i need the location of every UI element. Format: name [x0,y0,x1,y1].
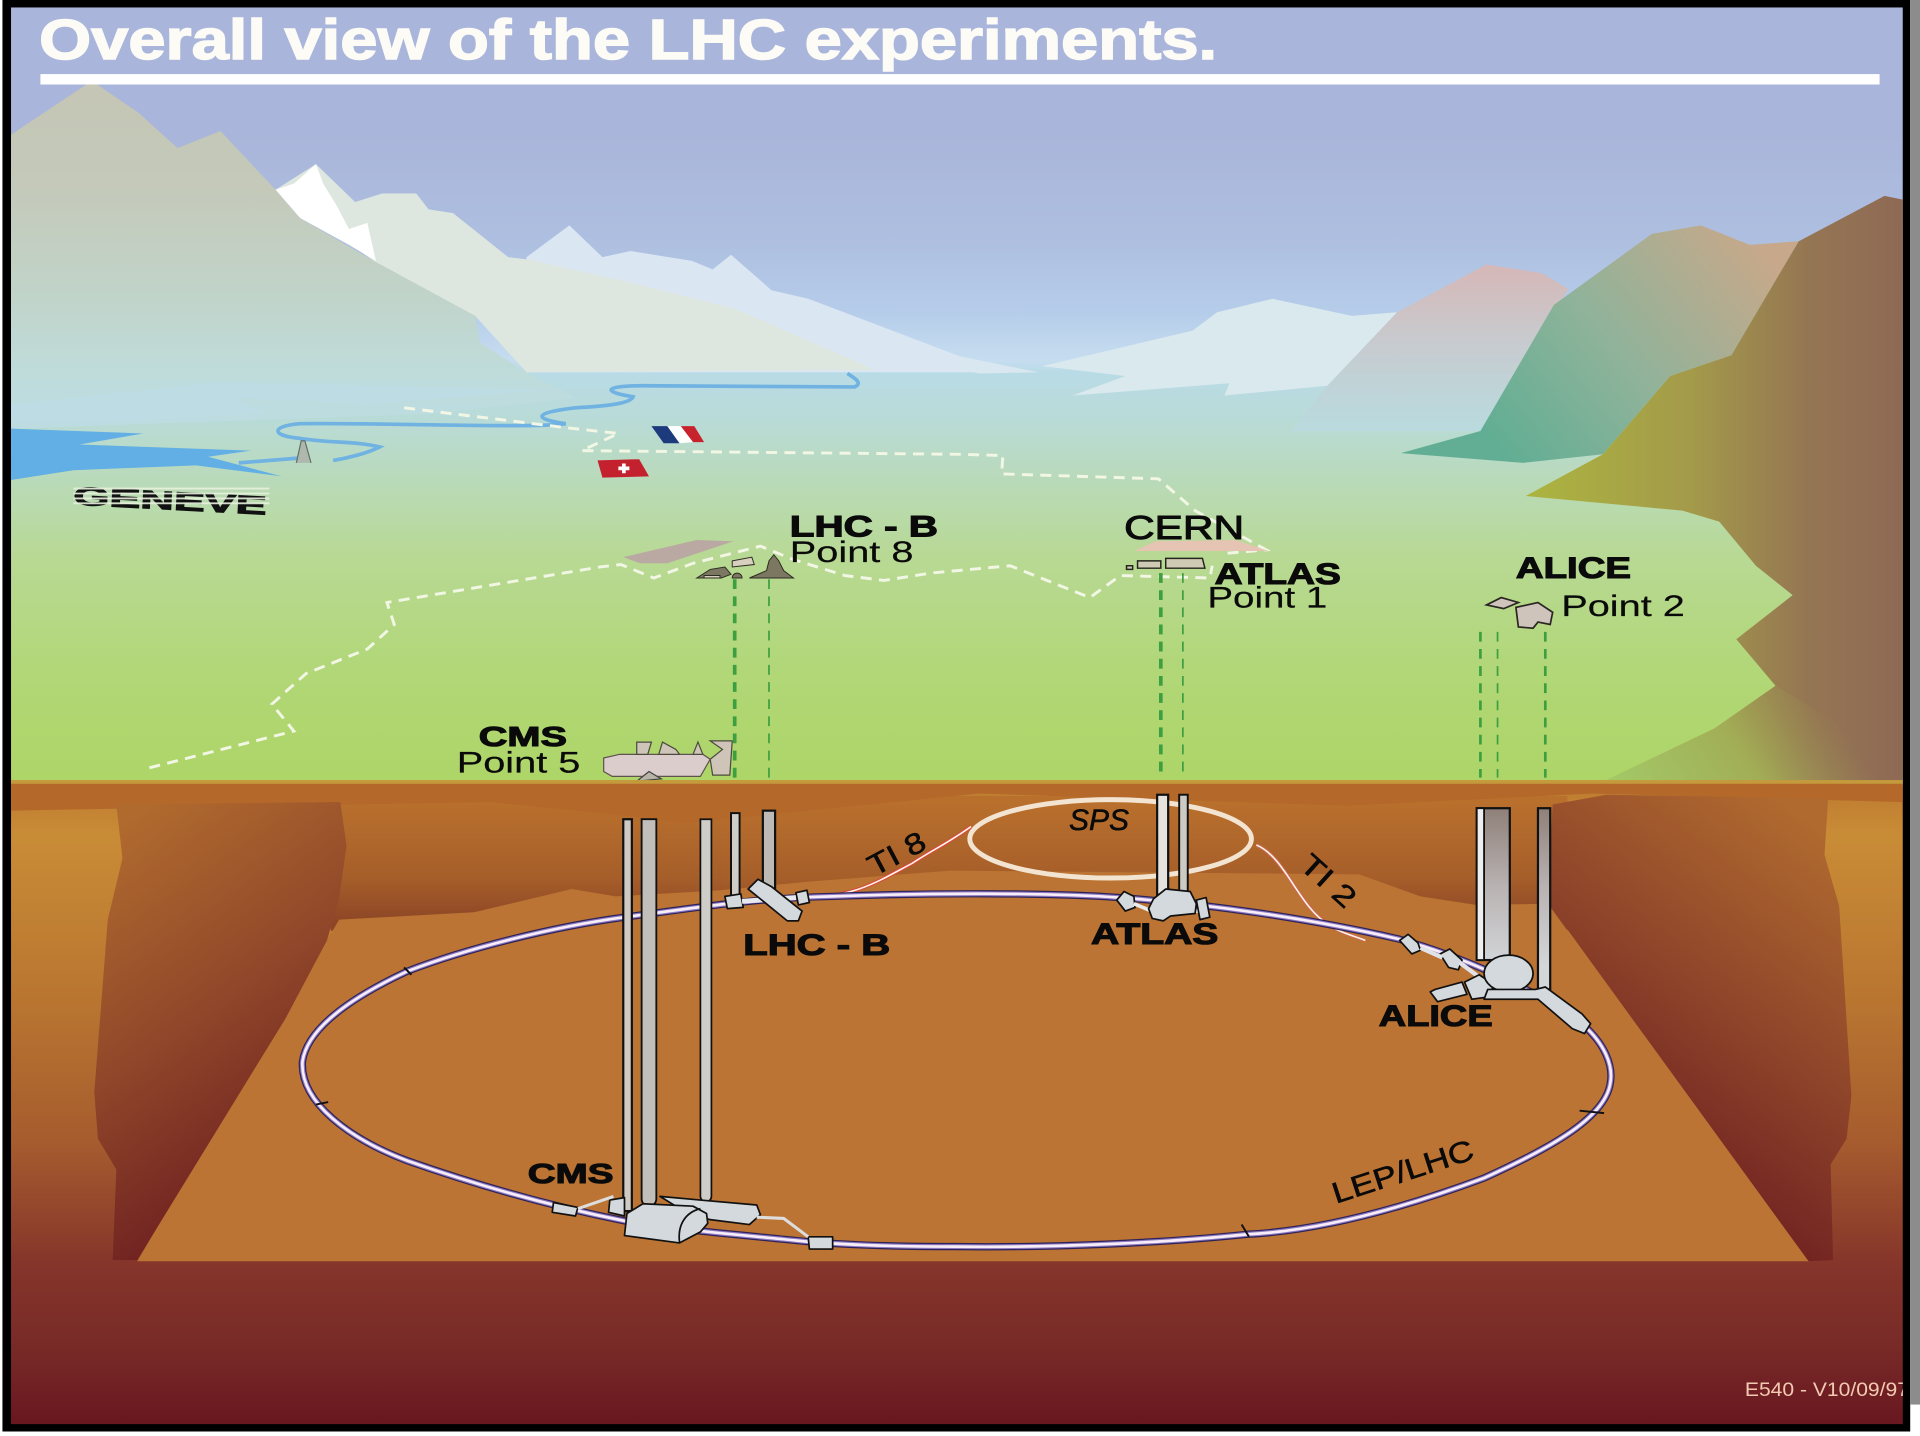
site: CERN Meyrin [1134,540,1269,551]
site: LHC-B surface [623,540,793,578]
site: CMS surface [604,741,732,781]
main detector hall [624,1204,708,1243]
icon: French flag [651,426,704,443]
car park [623,540,733,563]
label: Point 2: Point 2 [1561,590,1685,623]
pink mountain [1291,265,1569,431]
by-pass tunnels [578,1196,808,1237]
label: TI 2: TI 2 [1293,848,1363,915]
label: ATLAS Point 1: Point 1 [1207,581,1327,614]
label: ATLAS Point 1: ATLAS [1215,558,1341,591]
label: TI 8: TI 8 [862,825,932,883]
label: ATLAS cavern: ATLAS [1091,918,1218,951]
icon: Swiss flag [598,459,649,478]
pale cloud mountain [1042,299,1397,396]
rear cylinder [660,1196,760,1225]
LEP/LHC main ring [302,894,1611,1247]
label: CMS Point 5 [457,721,580,780]
shafts: LHC-B [731,811,775,899]
label: CMS Point 5: CMS [479,721,567,752]
detector: ATLAS [1117,889,1210,921]
left cavern [609,1198,624,1216]
river Rhone [239,373,858,463]
label: LHC-B Point 8: LHC - B [790,510,938,543]
title: Overall view of the LHC experiments. [39,8,1217,71]
back wall [331,796,1567,931]
footer reference code: E540 - V10/09/97 [1745,1380,1909,1401]
site: ALICE surface [1487,598,1553,628]
panel: alpine mountains [11,81,1903,781]
transfer lines, white core [808,827,1365,940]
site: ATLAS surface [1127,558,1205,569]
shafts: ALICE [1477,808,1550,989]
sky and meadow background [11,7,1903,786]
hall arch [679,1209,700,1243]
panel: underground cross-section [11,780,1903,1425]
shafts: CMS [623,819,711,1211]
snow mountain [276,164,876,372]
right cut wall [1548,795,1851,1261]
access shaft markers, dashed green [735,573,1545,780]
France-Switzerland border, dashed [149,408,1266,768]
shafts: ATLAS [1157,795,1188,902]
surface line [11,780,1903,784]
cavern floor [137,871,1810,1261]
service boxes [552,1203,578,1216]
near brown mountain [1526,196,1903,781]
label: CMS cavern: CMS [528,1158,613,1189]
SPS ring [970,800,1251,878]
transfer line TI 2 [1256,845,1365,940]
label: CERN: CERN [1124,510,1244,547]
mountain foot shading [1607,687,1850,780]
earth gradient [11,784,1903,1425]
transfer line TI 8 [838,825,972,892]
far ice ridge [527,225,1038,372]
detector: ALICE [1400,934,1591,1034]
upper soil band [11,784,1903,810]
detector: CMS [552,1196,833,1249]
label: ALICE cavern: ALICE [1379,1000,1493,1033]
detector: LHC-B [725,879,809,921]
label: LHC-B Point 8 [790,510,938,569]
label: ATLAS Point 1 [1207,558,1341,614]
label: LHC-B cavern: LHC - B [743,929,890,962]
snow cap [276,164,376,261]
label: LEP/LHC: LEP/LHC [1328,1134,1478,1210]
left cut wall [94,802,347,1260]
label: Geneve [74,487,270,516]
title rule [40,74,1880,84]
label: ALICE: ALICE [1516,552,1631,585]
pylon near lake [296,441,311,463]
left grey mountain [11,81,576,429]
label: LHC-B Point 8: Point 8 [790,536,913,569]
right grey margin [1910,0,1920,1405]
label: Geneve: GENEVE [73,483,267,521]
pale haze bands [11,382,563,422]
label: CMS Point 5: Point 5 [457,747,580,780]
Lake Geneva [11,429,282,480]
buildings [697,555,793,578]
far right pale mountain [973,372,1034,374]
green and tan mountain [1401,225,1799,463]
label: SPS: SPS [1069,804,1129,837]
